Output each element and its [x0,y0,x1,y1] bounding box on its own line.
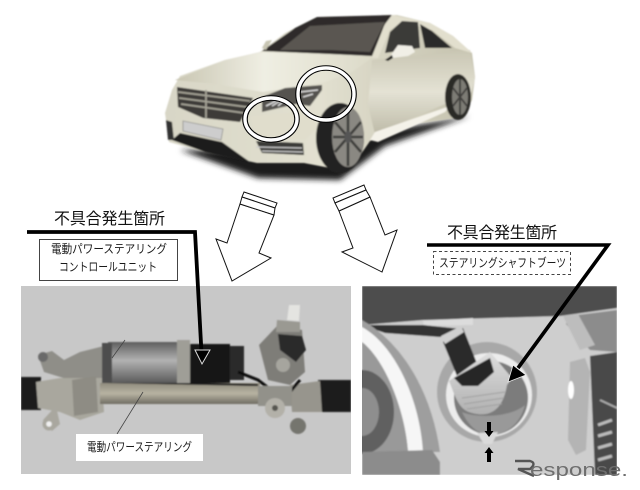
label box: control unit: コントロールユニット [59,260,157,274]
watermark: Response [515,460,628,480]
front wheel [316,103,364,173]
leader lines [112,340,143,434]
upper right bracket [566,310,617,352]
car body [165,15,475,173]
valve assembly [259,325,305,385]
boot [449,352,512,414]
grille [177,87,253,122]
left round part [362,320,440,452]
panel: steering shaft boot photo [362,286,617,475]
shaft [443,328,478,376]
gear housing [36,378,104,420]
label box: control unit [40,240,178,280]
callout: right defect location [427,224,608,382]
motor [108,342,178,383]
leader line [27,232,202,362]
steering rack assembly [21,305,351,434]
callout: left defect location [27,210,210,364]
windshield [262,15,392,56]
headlight [262,85,322,112]
hood [175,52,373,92]
marker circle: fender [298,68,354,120]
upper left bracket [40,346,102,379]
pedal [362,450,440,475]
heading: 不具合発生箇所 [54,210,165,228]
marker circle: headlight corner [245,98,297,140]
roof rail [372,15,472,58]
gap arrow: up [484,447,494,462]
label box: steering shaft boot [434,252,570,274]
lower intake [172,133,250,162]
sill highlight [370,106,450,142]
control unit [190,344,230,383]
gap arrow: down [484,422,494,437]
rim notch [477,432,498,444]
far mirror [262,40,272,50]
car shadow [180,116,470,180]
watermark: Response: esponse. [530,460,628,480]
arrowhead [508,365,526,382]
label box: steering shaft boot: ステアリングシャフトブーツ [439,255,566,270]
label: electric power steering [76,434,203,461]
label box: control unit: 電動パワーステアリング [51,242,167,256]
label: electric power steering: 電動パワーステアリング [87,440,192,454]
arrowhead [195,350,210,364]
side panel [368,50,475,134]
illustration: car with two marked locations [165,15,475,180]
heading: 不具合発生箇所 [447,224,557,242]
right bracket plate [568,358,590,455]
arrow: car to right photo [333,185,397,272]
panel: electric power steering photo [21,286,351,474]
opening rim [437,342,537,442]
rear wheel [445,74,471,120]
number plate [183,121,223,140]
mirror [391,45,415,58]
leader line [427,245,608,368]
bumper light area [250,112,320,140]
rack bar [100,383,260,404]
right gear area [590,352,617,475]
side windows [385,21,420,53]
dark upper band [362,286,617,325]
arrow: car to left photo [216,192,277,281]
